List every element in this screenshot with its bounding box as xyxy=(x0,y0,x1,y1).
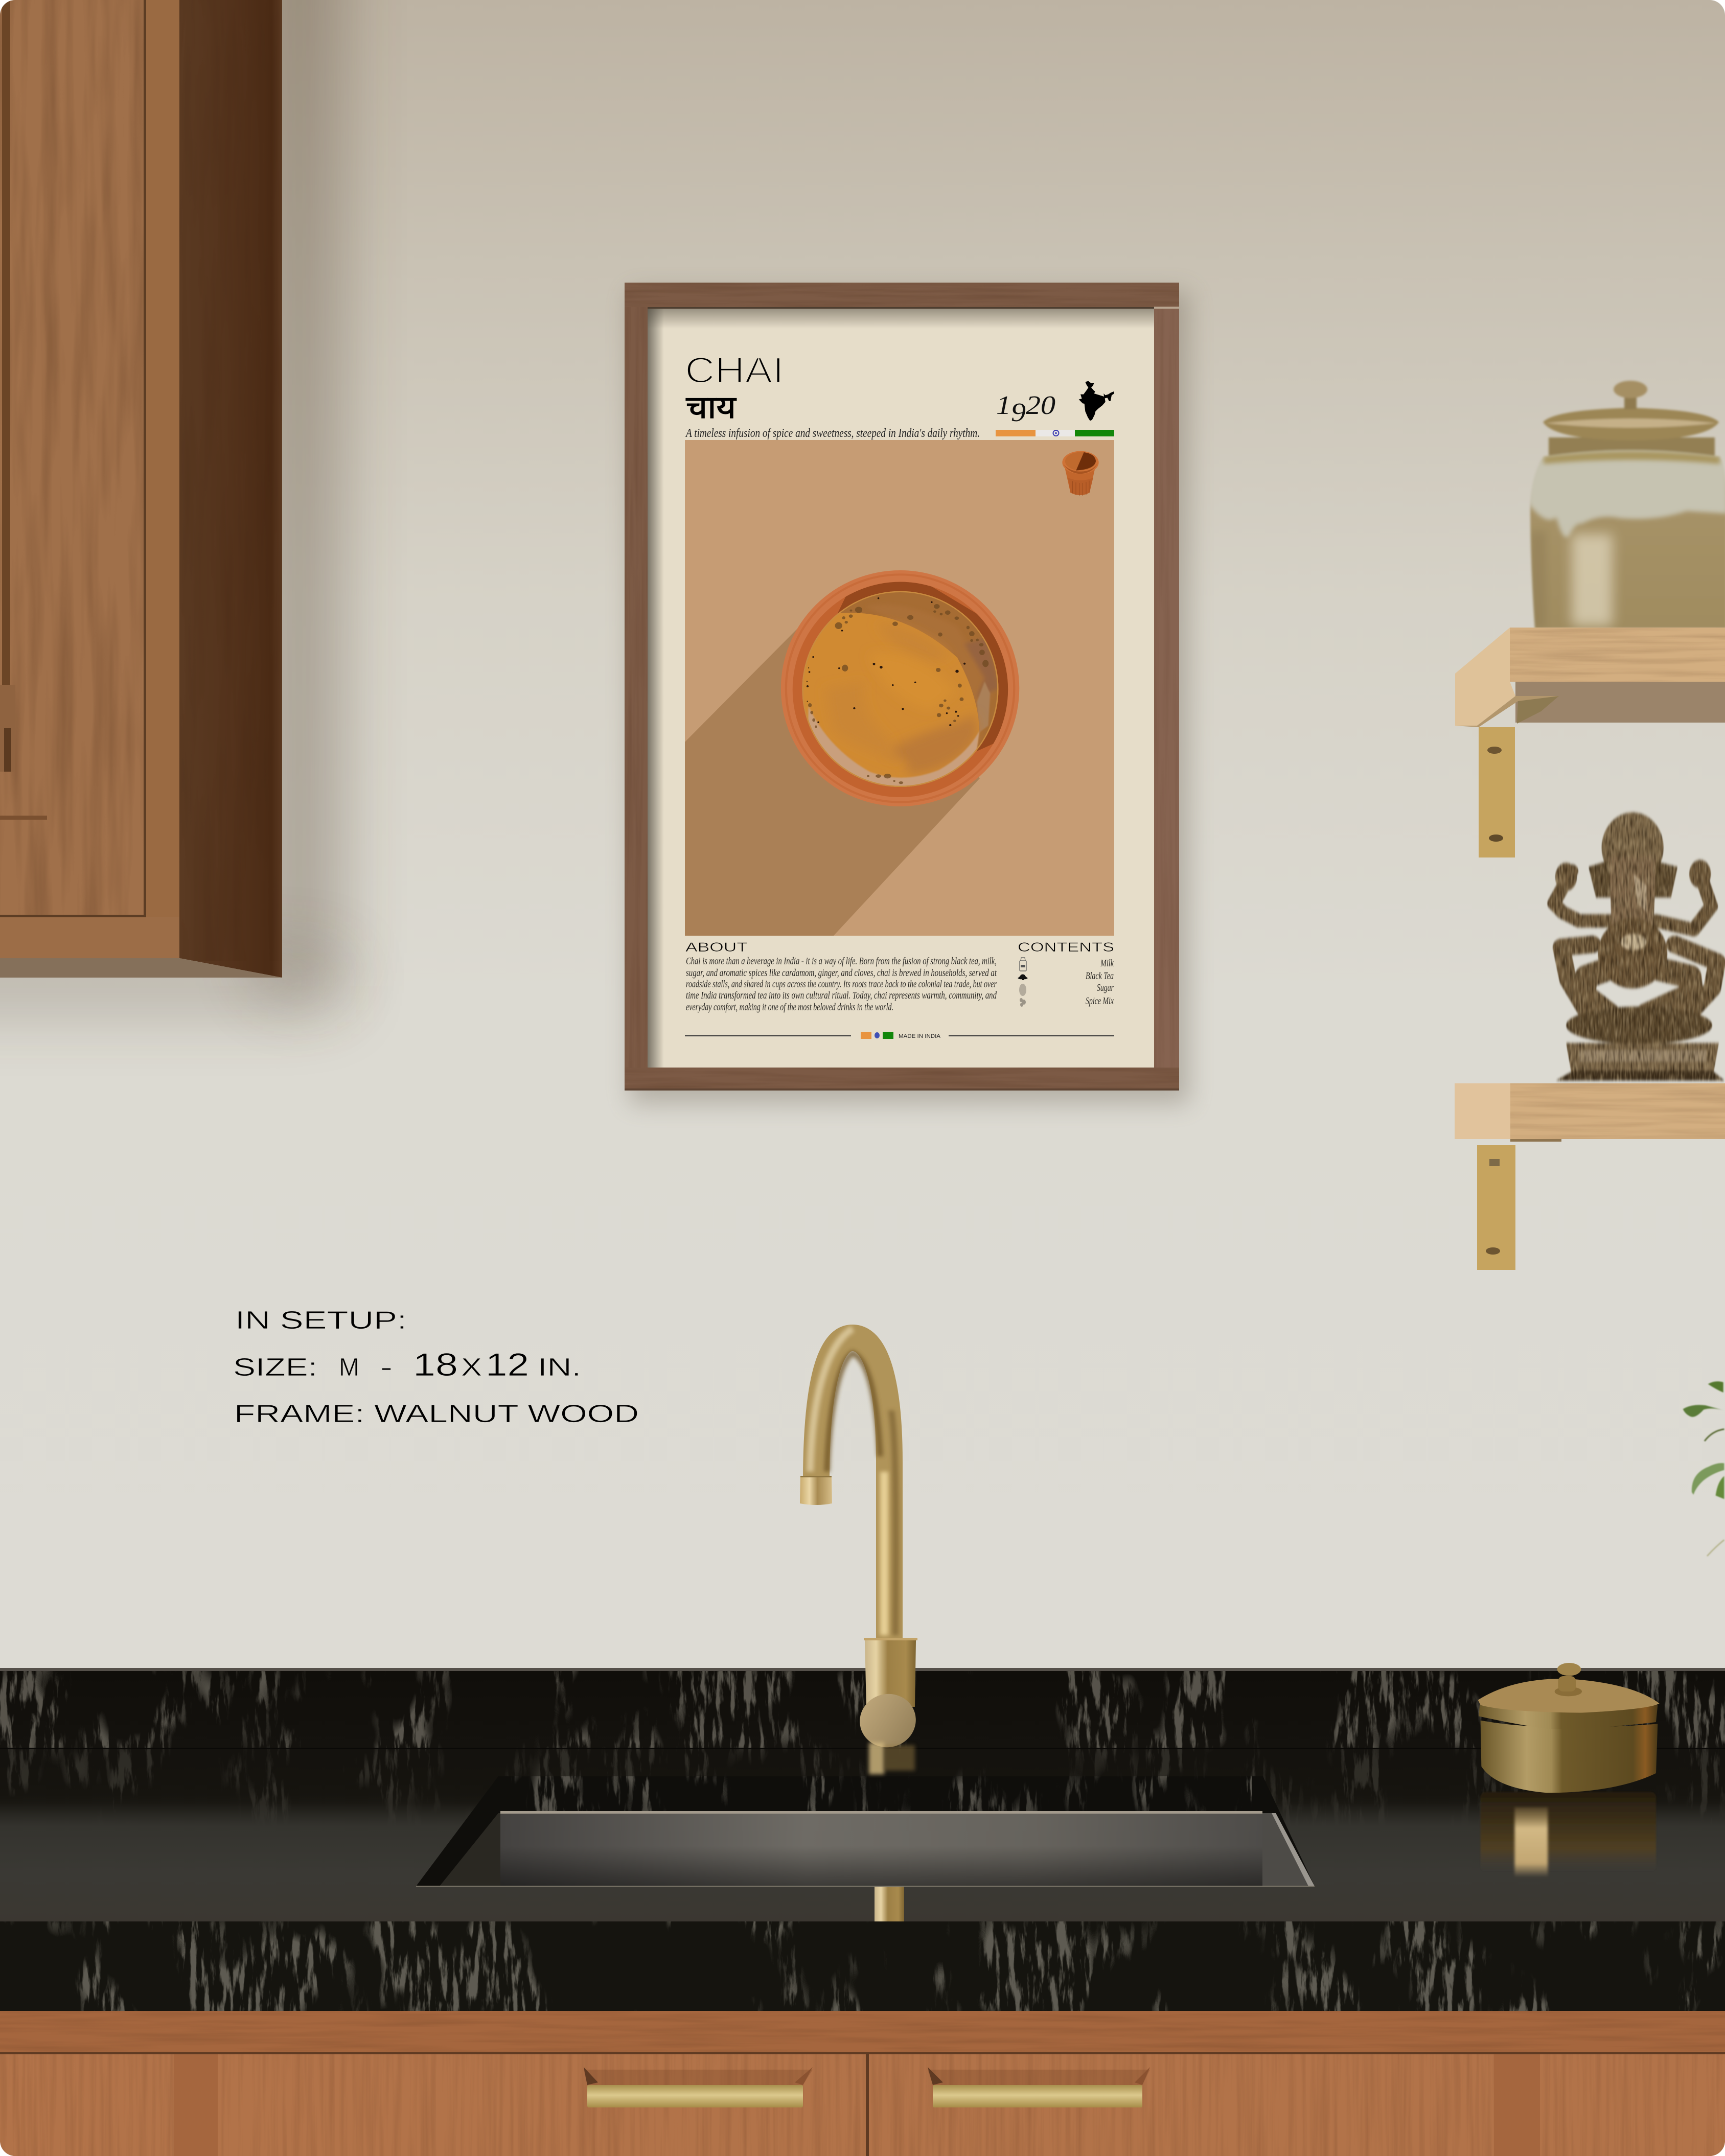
door right xyxy=(1540,2054,1725,2156)
contents labels: Sugar xyxy=(1097,982,1114,993)
title: CHAI xyxy=(685,351,784,391)
chai cup top view xyxy=(781,569,1019,806)
illustration panel xyxy=(685,440,1114,936)
hindi title: चाय xyxy=(686,390,737,431)
backsplash and counter xyxy=(0,1668,1725,2011)
handle left xyxy=(584,2067,813,2107)
walnut frame xyxy=(625,283,1179,1091)
setup line 2 xyxy=(233,1347,581,1383)
shelf side xyxy=(1455,628,1515,726)
bracket xyxy=(1479,727,1515,857)
jar xyxy=(1528,381,1725,629)
tea bubbles xyxy=(808,604,988,784)
icon: india map xyxy=(1079,381,1114,421)
setup details xyxy=(233,1307,639,1428)
shelf underside shadow xyxy=(1515,682,1725,723)
contents labels: Spice Mix xyxy=(1086,995,1114,1007)
upper shelf with jar xyxy=(1455,381,1725,857)
icon: black tea xyxy=(1018,974,1028,980)
setup line 2: X xyxy=(461,1354,482,1381)
plant leaves xyxy=(1683,1381,1724,1556)
setup line 2: 18 xyxy=(413,1347,458,1383)
ganesha statue xyxy=(1554,813,1724,1080)
setup line 2: SIZE: xyxy=(233,1354,317,1381)
about heading: ABOUT xyxy=(685,940,748,955)
year: 9 xyxy=(1011,398,1026,427)
sink xyxy=(416,1776,1315,1921)
year: 20 xyxy=(1026,391,1055,420)
cup long shadow xyxy=(685,616,980,936)
contents list xyxy=(1018,958,1114,1007)
about text xyxy=(686,956,997,1013)
about text: sugar, and aromatic spices like cardamom, ginger, and cloves, chai is brewed in households, served at xyxy=(686,967,997,979)
lower shelf with ganesha statue xyxy=(1455,813,1725,1270)
lit tea xyxy=(802,613,979,778)
counter edge xyxy=(0,1921,1725,2011)
flag bar xyxy=(996,430,1114,436)
inner wall xyxy=(793,582,1008,797)
clay rim xyxy=(781,570,1019,806)
icon: small clay cup xyxy=(1062,451,1099,496)
shelf face xyxy=(1510,628,1725,682)
about text: everyday comfort, making it one of the most beloved drinks in the world. xyxy=(686,1002,893,1013)
setup line 2: M xyxy=(339,1354,359,1381)
framed poster xyxy=(625,283,1189,1104)
tin reflection xyxy=(1481,1792,1656,1872)
contents labels xyxy=(1086,958,1114,1007)
about text: roadside stalls, and shared in cups across the country. Its roots trace back to the colonial tea trade, but over xyxy=(686,979,997,990)
icon: sugar xyxy=(1019,984,1026,996)
footer: made in india xyxy=(685,1032,1114,1039)
year: 1 xyxy=(996,391,1009,420)
about text: Chai is more than a beverage in India - it is a way of life. Born from the fusion of strong black tea, milk, xyxy=(686,956,997,967)
about text: time India transformed tea into its own cultural ritual. Today, chai represents warmth, community, and xyxy=(686,990,997,1001)
paper xyxy=(648,307,1154,1068)
door left xyxy=(0,2054,174,2156)
footer: made in india: MADE IN INDIA xyxy=(899,1033,941,1039)
contents labels: Milk xyxy=(1100,958,1114,969)
shelf face xyxy=(1455,1083,1725,1139)
setup line 1: IN SETUP: xyxy=(235,1307,407,1334)
contents labels: Black Tea xyxy=(1086,970,1114,982)
wall background xyxy=(0,0,1725,1671)
contents heading: CONTENTS xyxy=(1018,940,1114,955)
setup line 3: FRAME: WALNUT WOOD xyxy=(234,1400,639,1428)
setup line 2: 12 xyxy=(486,1347,529,1383)
door centre right xyxy=(869,2054,1494,2156)
faucet reflection xyxy=(875,1887,904,1921)
setup line 2: - xyxy=(380,1354,393,1381)
dark specks xyxy=(807,597,965,726)
setup line 2: IN. xyxy=(538,1354,581,1381)
wall cabinet xyxy=(0,0,282,978)
base cabinet xyxy=(0,2011,1725,2156)
door centre left xyxy=(218,2054,866,2156)
bracket xyxy=(1477,1145,1515,1270)
tagline: A timeless infusion of spice and sweetness, steeped in India's daily rhythm. xyxy=(685,426,980,440)
handle right xyxy=(928,2067,1150,2107)
tea surface xyxy=(802,591,999,787)
brass tin xyxy=(1478,1663,1660,1877)
icon: milk bottle xyxy=(1020,958,1026,971)
faucet xyxy=(800,1329,922,1774)
icon: spice mix xyxy=(1020,998,1026,1007)
frame drop shadow xyxy=(630,291,1189,1104)
pale milky crescent xyxy=(808,706,979,794)
